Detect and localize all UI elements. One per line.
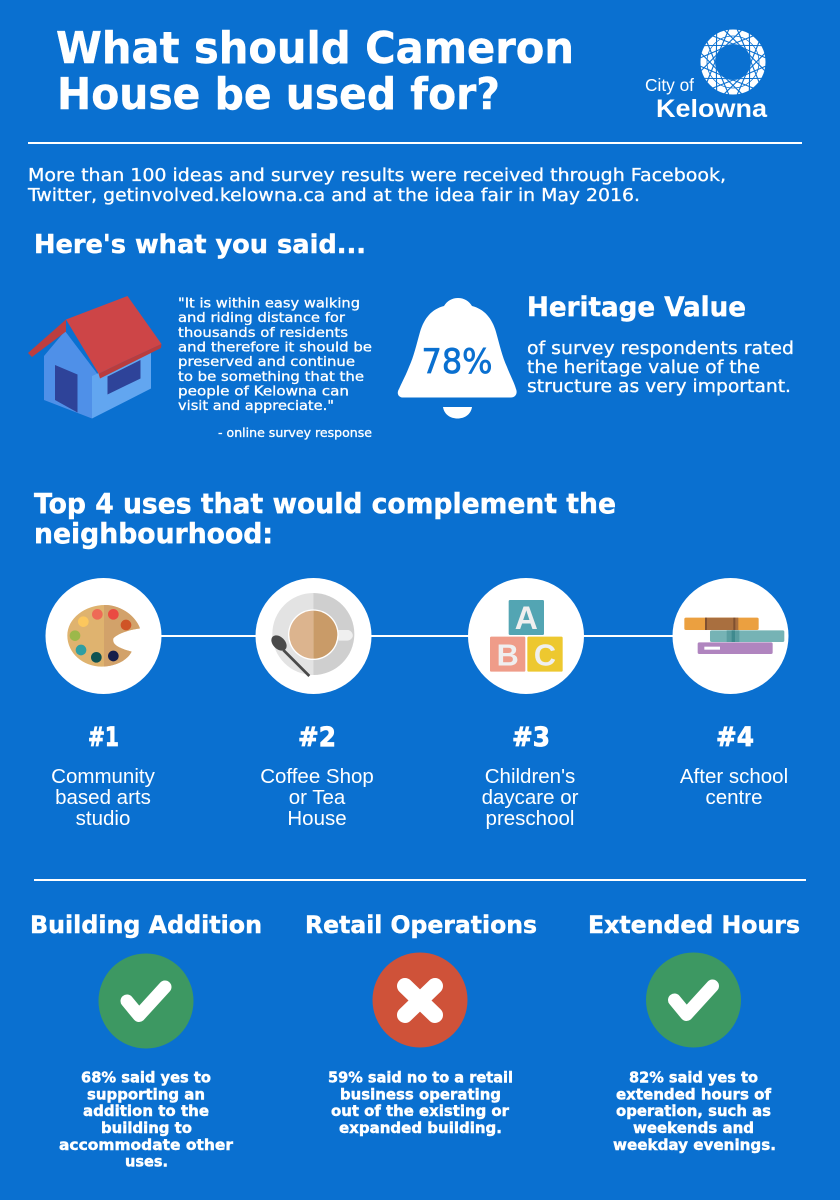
text: addition result: addition to the xyxy=(83,1102,209,1120)
text: addition result: building to xyxy=(101,1119,192,1137)
panel: extended hours: Extended Hours xyxy=(588,911,800,939)
text: retail result: business operating xyxy=(340,1086,501,1104)
rank 1: #1 xyxy=(88,722,119,753)
label: use 2: Coffee Shop xyxy=(260,765,374,788)
title: House be used for? xyxy=(57,69,500,120)
text: hours result: operation, such as xyxy=(616,1102,771,1120)
panel: extended hours xyxy=(588,911,800,1154)
logo wordmark: Kelowna xyxy=(656,95,768,123)
text: addition result: supporting an xyxy=(87,1086,205,1104)
icon: alphabet blocks: B xyxy=(497,639,519,673)
heading: here's what you said: Here's what you said... xyxy=(34,230,366,260)
logo: City of Kelowna xyxy=(645,29,768,123)
panel: use 1 arts studio xyxy=(46,578,162,830)
panel: heritage value: the heritage value of the xyxy=(527,357,760,378)
heading: top 4 uses xyxy=(34,487,616,550)
rank 4: #4 xyxy=(716,722,754,753)
quote text: to be something that the xyxy=(178,369,364,385)
icon: red cross xyxy=(372,952,468,1048)
label: use 2: House xyxy=(287,807,347,830)
icon: alphabet blocks: A xyxy=(515,600,538,636)
rank 3: #3 xyxy=(512,722,550,753)
quote text: - online survey response xyxy=(218,426,372,440)
panel: retail operations: Retail Operations xyxy=(305,911,537,939)
text: hours result: 82% said yes to xyxy=(629,1068,758,1086)
title xyxy=(56,23,574,120)
quote text: "It is within easy walking xyxy=(178,296,360,312)
text: hours result: extended hours of xyxy=(616,1086,771,1104)
label: use 1: based arts xyxy=(55,786,151,809)
icon: paint palette xyxy=(67,605,140,667)
label: use 2: or Tea xyxy=(289,786,346,809)
text: addition result: accommodate other xyxy=(59,1136,234,1154)
label: use 2 xyxy=(260,765,374,830)
label: use 1: studio xyxy=(76,807,130,830)
panel: heritage value: of survey respondents rated xyxy=(527,338,794,359)
quote text: preserved and continue xyxy=(178,354,355,370)
panel: heritage value xyxy=(527,292,794,397)
label: use 3 xyxy=(482,765,579,830)
panel: building addition xyxy=(30,911,262,1170)
icon: house xyxy=(28,296,162,418)
text: hours result: weekends and xyxy=(633,1119,754,1137)
quote text: thousands of residents xyxy=(178,325,348,341)
label: use 1: Community xyxy=(51,765,156,788)
panel: heritage value: Heritage Value xyxy=(527,292,746,323)
label: use 3: daycare or xyxy=(482,786,579,809)
text: hours result xyxy=(613,1068,776,1154)
icon: bell with 78%: 78% xyxy=(422,342,492,382)
text: retail result: 59% said no to a retail xyxy=(328,1068,513,1086)
icon: alphabet blocks: C xyxy=(534,639,556,673)
panel: retail operations xyxy=(305,911,537,1137)
logo wordmark: City of xyxy=(645,75,694,95)
intro text: Twitter, getinvolved.kelowna.ca and at the idea fair in May 2016. xyxy=(27,185,640,206)
label: use 4: After school xyxy=(680,765,788,788)
icon: green check xyxy=(646,952,741,1048)
title: What should Cameron xyxy=(56,23,574,74)
icon: coffee cup xyxy=(268,593,354,676)
heading: top 4 uses: Top 4 uses that would complement the xyxy=(34,487,616,520)
text: hours result: weekday evenings. xyxy=(613,1136,776,1154)
quote text xyxy=(178,296,372,440)
icon: green check xyxy=(98,954,194,1048)
quote text: people of Kelowna can xyxy=(178,384,349,400)
label: use 4 xyxy=(680,765,788,809)
panel: use 2 coffee shop xyxy=(256,578,374,830)
intro text: More than 100 ideas and survey results were received through Facebook, xyxy=(28,165,726,186)
label: use 3: Children's xyxy=(485,765,575,788)
text: retail result xyxy=(328,1068,513,1137)
label: use 3: preschool xyxy=(486,807,574,830)
rank 2: #2 xyxy=(298,722,336,753)
logo wordmark xyxy=(645,75,768,123)
icon: bell with 78% xyxy=(398,298,517,418)
text: retail result: expanded building. xyxy=(339,1119,502,1137)
panel: use 3 daycare xyxy=(468,578,584,830)
quote text: visit and appreciate." xyxy=(178,398,334,414)
label: use 1 xyxy=(51,765,156,830)
label: use 4: centre xyxy=(706,786,762,809)
text: addition result: uses. xyxy=(125,1152,168,1170)
text: addition result xyxy=(59,1068,234,1170)
quote text: and riding distance for xyxy=(178,310,345,326)
panel: use 4 after school xyxy=(672,578,788,809)
quote text: and therefore it should be xyxy=(178,340,372,356)
panel: building addition: Building Addition xyxy=(30,911,262,939)
icon: alphabet blocks xyxy=(490,600,563,673)
text: addition result: 68% said yes to xyxy=(81,1068,211,1086)
text: retail result: out of the existing or xyxy=(331,1102,510,1120)
intro text xyxy=(27,165,726,206)
icon: logo lattice ring xyxy=(700,29,766,95)
icon: stack of books xyxy=(684,618,784,654)
heading: top 4 uses: neighbourhood: xyxy=(34,517,273,550)
panel: heritage value: structure as very important. xyxy=(527,376,791,397)
